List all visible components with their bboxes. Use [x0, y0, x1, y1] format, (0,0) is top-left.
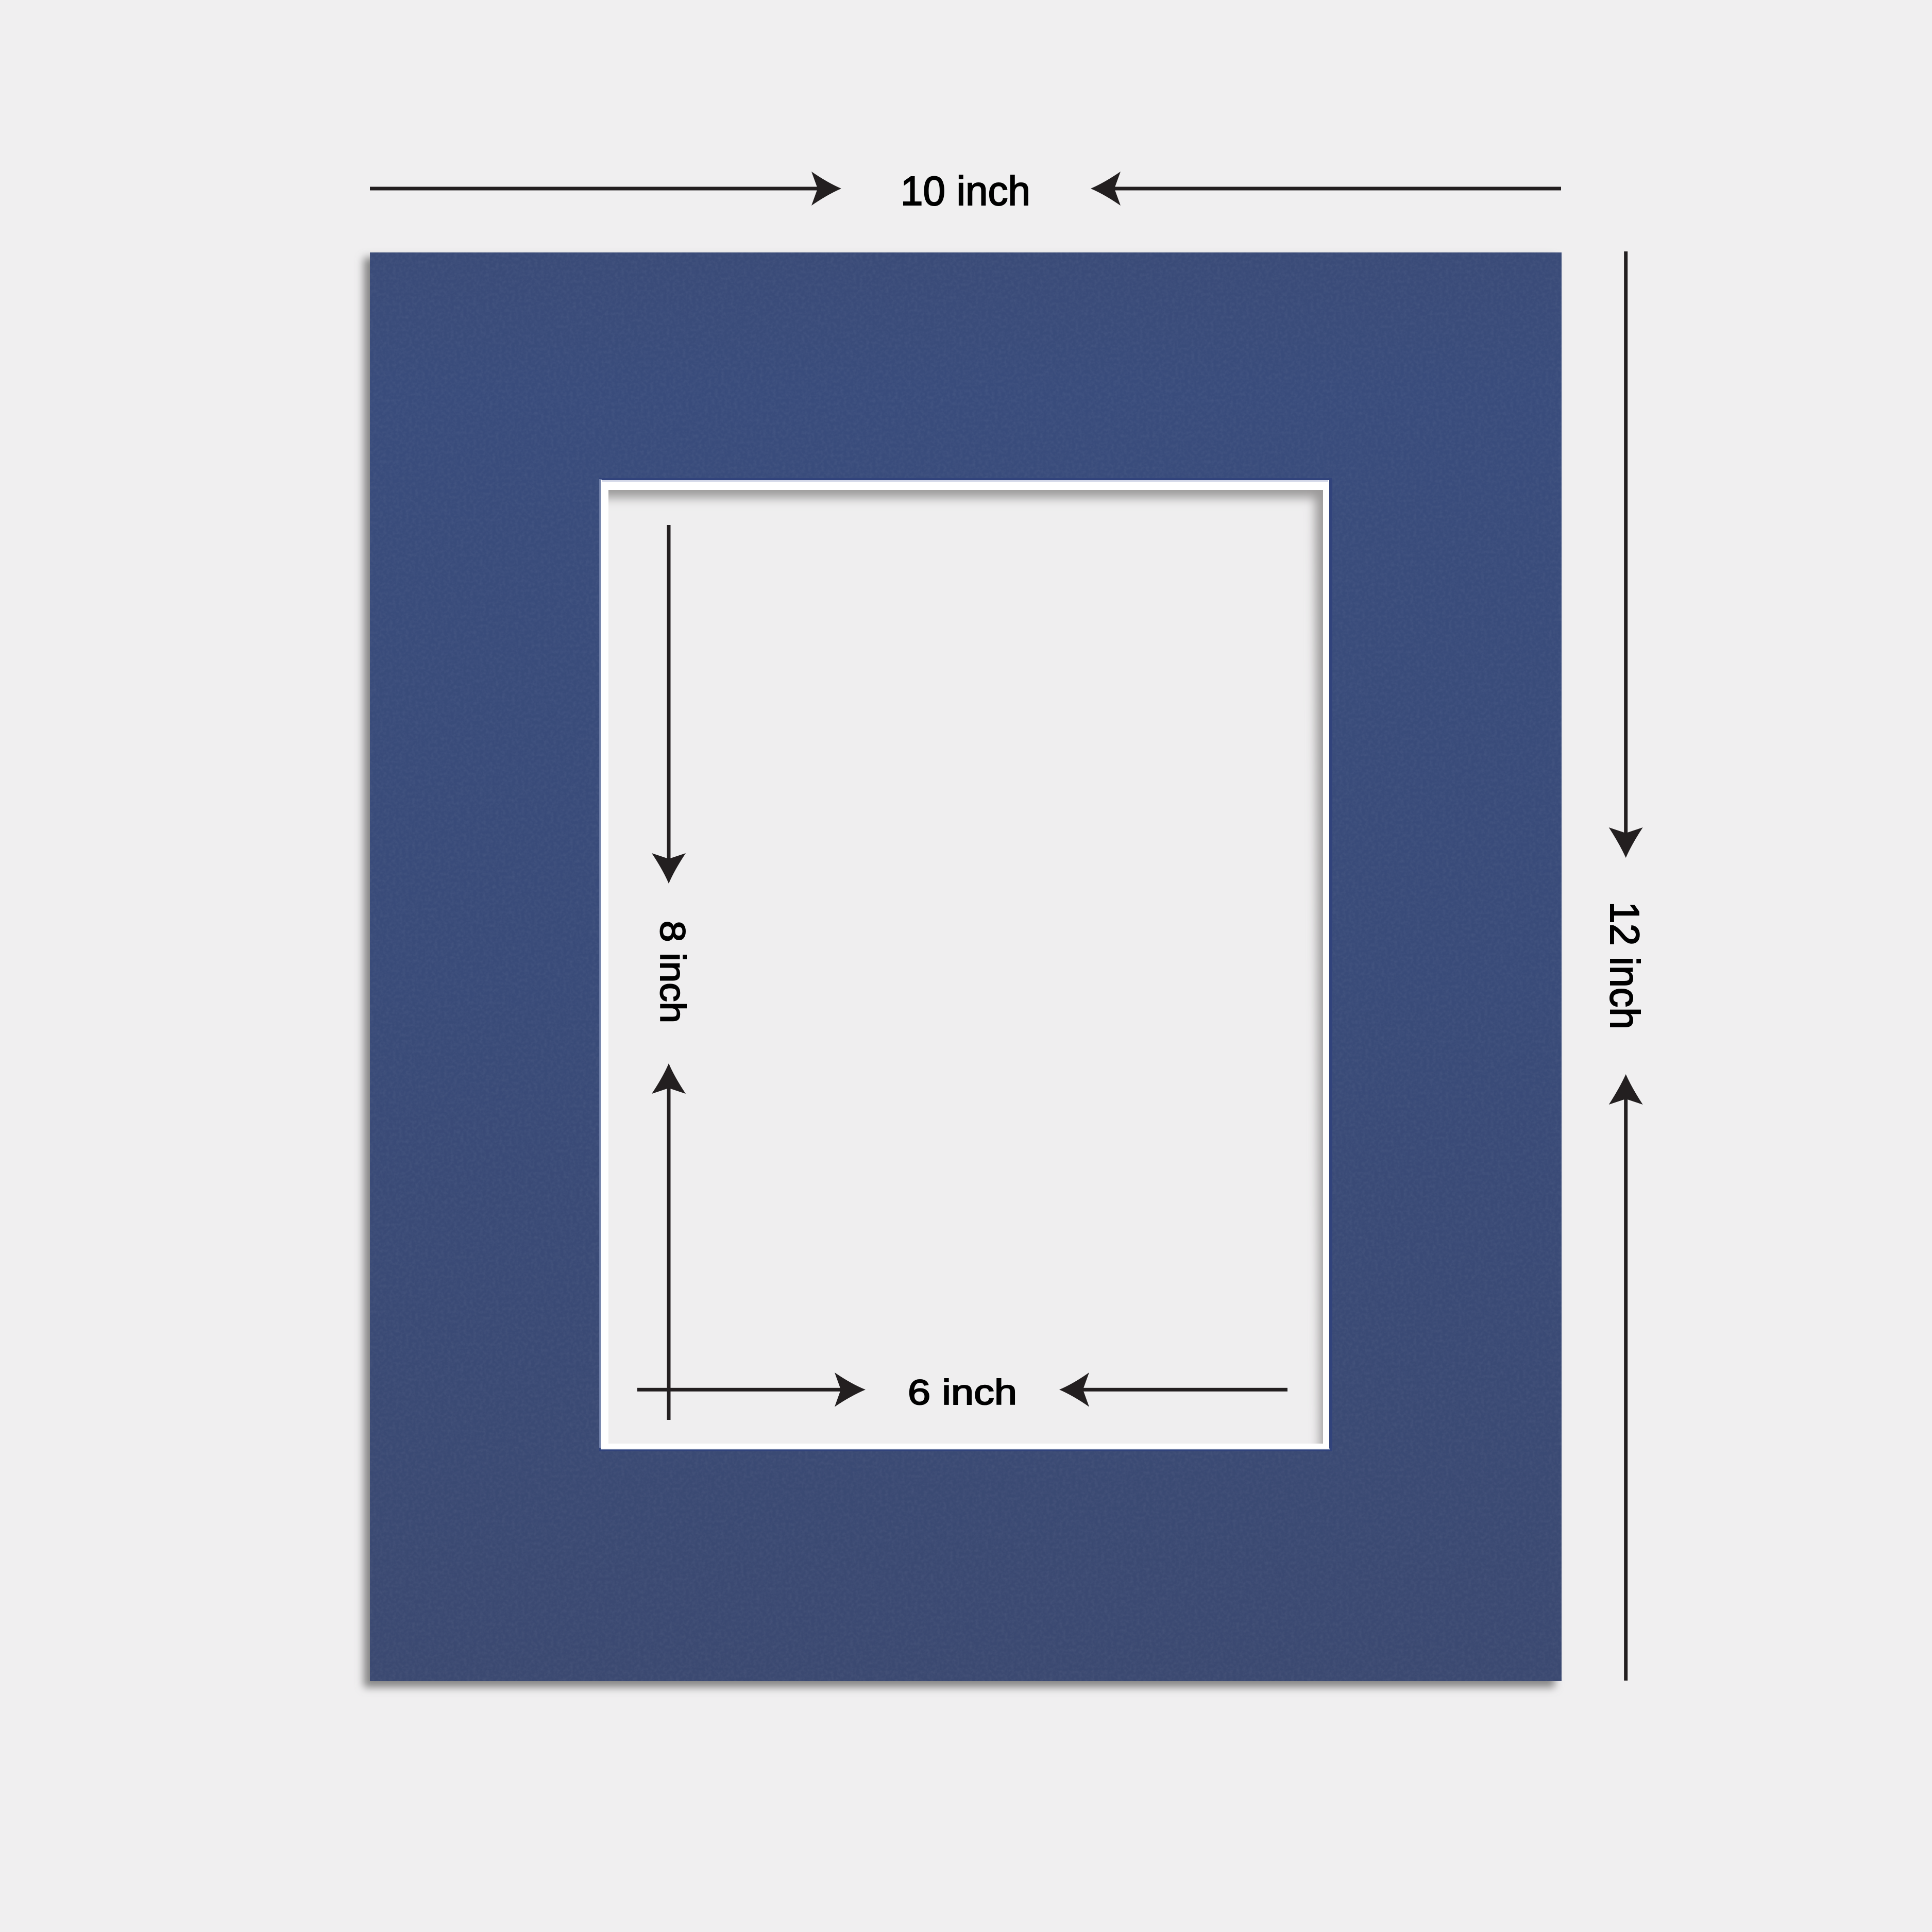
arrow: 12 inch bottom	[1609, 1074, 1643, 1681]
window white bevel	[601, 480, 1329, 1449]
arrow: 12 inch top	[1609, 251, 1643, 858]
arrow: 6 inch left	[637, 1372, 866, 1407]
dimension label: 6 inch: 6 inch	[908, 1372, 1017, 1412]
arrow: 8 inch top	[652, 525, 686, 884]
mat surface	[370, 252, 1562, 1681]
mat paper grain	[370, 252, 1562, 1681]
arrow: 10 inch right	[1091, 172, 1561, 206]
window opening	[608, 490, 1323, 1444]
arrow: 6 inch right	[1059, 1372, 1287, 1407]
mat drop shadow	[364, 258, 1555, 1687]
panel: mat board	[364, 252, 1562, 1687]
dimension label: 8 inch: 8 inch	[653, 921, 692, 1023]
dimension label: 12 inch: 12 inch	[1602, 902, 1648, 1029]
window cut halo	[599, 478, 1332, 1451]
arrow: 10 inch left	[370, 172, 841, 206]
arrow: 8 inch bottom	[652, 1063, 686, 1420]
dimension label: 10 inch: 10 inch	[901, 168, 1030, 214]
